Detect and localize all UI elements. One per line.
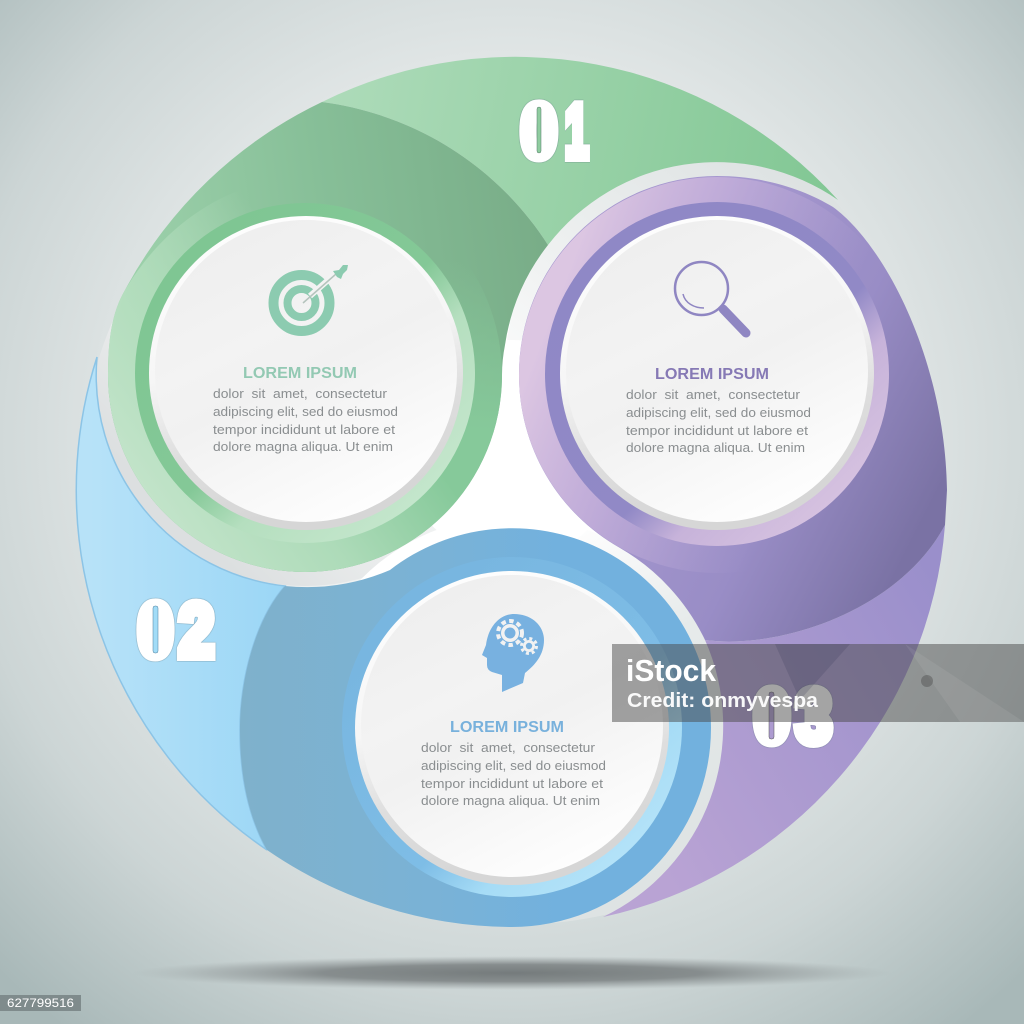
- text block: blue: [421, 719, 606, 808]
- text block: purple: [626, 366, 811, 455]
- text block: purple: tempor incididunt ut labore et: [626, 423, 808, 438]
- text block: purple: adipiscing elit, sed do eiusmod: [626, 405, 811, 420]
- number 02: 02: [138, 588, 220, 672]
- text block: green: dolor sit amet, consectetur: [213, 386, 388, 401]
- text block: purple: dolore magna aliqua. Ut enim: [626, 440, 805, 455]
- watermark band: [612, 644, 1024, 722]
- text block: blue: tempor incididunt ut labore et: [421, 776, 603, 791]
- icon: magnifying glass: [675, 262, 746, 333]
- panel: blue white circle: [355, 571, 669, 885]
- text block: green: dolore magna aliqua. Ut enim: [213, 439, 393, 454]
- panel: green white circle: [149, 216, 463, 530]
- panel: purple white circle: [560, 216, 874, 530]
- text block: blue: dolor sit amet, consectetur: [421, 740, 596, 755]
- ring gaps: [100, 322, 644, 923]
- number 01: [521, 89, 592, 173]
- floor shadow: [132, 956, 892, 990]
- watermark band: Credit: onmyvespa: [627, 690, 819, 712]
- number 01: 0: [521, 89, 563, 173]
- segment 02: blue swirl: [76, 357, 711, 927]
- image id tag: 627799516: [7, 996, 74, 1010]
- segment 01: green swirl: [108, 57, 838, 572]
- number 03: 03: [754, 674, 838, 758]
- segment 03: purple swirl: [519, 176, 947, 917]
- text block: green: tempor incididunt ut labore et: [213, 422, 395, 437]
- text block: green: adipiscing elit, sed do eiusmod: [213, 404, 398, 419]
- number 01: 1: [565, 89, 592, 173]
- watermark band: iStock: [626, 653, 717, 688]
- text block: purple: LOREM IPSUM: [655, 366, 769, 383]
- text block: green: [213, 365, 398, 454]
- text block: blue: adipiscing elit, sed do eiusmod: [421, 758, 606, 773]
- text block: blue: dolore magna aliqua. Ut enim: [421, 793, 600, 808]
- icon: target with arrow: [274, 265, 348, 331]
- text block: blue: LOREM IPSUM: [450, 719, 564, 736]
- text block: purple: dolor sit amet, consectetur: [626, 387, 801, 402]
- image id tag: [0, 995, 81, 1011]
- text block: green: LOREM IPSUM: [243, 365, 357, 382]
- icon: head with gears: [482, 614, 544, 692]
